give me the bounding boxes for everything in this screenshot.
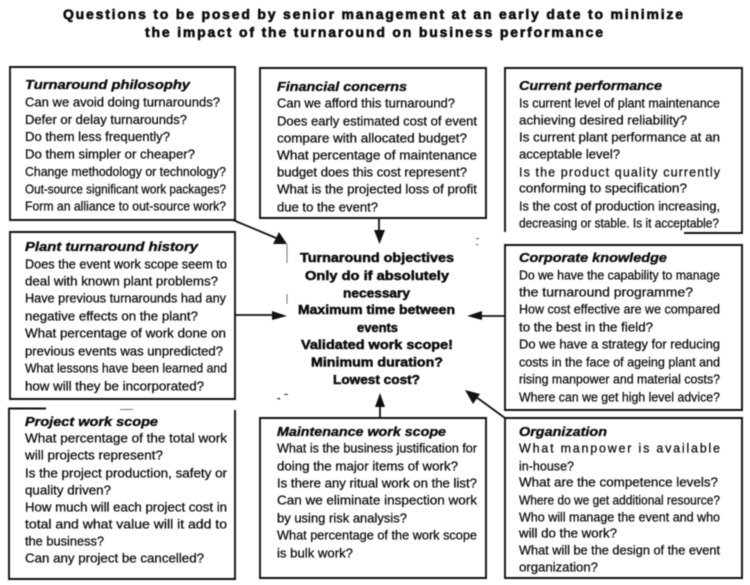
arrow: turnaround philosophy to objectives <box>233 220 287 244</box>
central objectives: events <box>357 320 398 335</box>
questions: project work scope: the business? <box>25 534 104 548</box>
panel: project work scope <box>9 408 235 579</box>
central objectives: Minimum duration? <box>311 354 443 370</box>
questions: turnaround philosophy: Change methodology or technology? <box>25 165 226 179</box>
questions: corporate knowledge: Where can we get high level advice? <box>519 390 720 404</box>
questions: project work scope: quality driven? <box>25 484 111 498</box>
questions: corporate knowledge <box>519 268 720 404</box>
central objectives: Turnaround objectives <box>300 250 454 265</box>
questions: plant turnaround history: Does the event work scope seem to <box>25 258 227 272</box>
questions: organization: What manpower is available <box>519 442 720 456</box>
questions: financial concerns <box>277 96 478 214</box>
heading: financial concerns: Financial concerns <box>277 79 407 94</box>
questions: organization <box>518 442 721 574</box>
questions: plant turnaround history: how will they be incorporated? <box>25 380 204 394</box>
arrow: corporate knowledge to objectives <box>467 311 505 320</box>
arrow: financial concerns to objectives <box>374 219 385 244</box>
panel: plant turnaround history <box>10 232 235 399</box>
questions: maintenance work scope: Can we eliminate inspection work <box>277 494 478 508</box>
panel: turnaround philosophy <box>10 67 235 220</box>
arrow: organization to objectives <box>465 390 505 418</box>
heading: plant turnaround history: Plant turnaround history <box>25 239 199 254</box>
questions: corporate knowledge: the turnaround programme? <box>519 286 693 300</box>
questions: maintenance work scope <box>277 442 478 560</box>
questions: turnaround philosophy: Out-source significant work packages? <box>25 182 226 196</box>
questions: plant turnaround history: deal with known plant problems? <box>25 274 218 288</box>
title: the impact of the turnaround on business performance <box>145 24 603 40</box>
questions: corporate knowledge: rising manpower and material costs? <box>519 372 720 386</box>
questions: turnaround philosophy <box>25 96 226 214</box>
questions: financial concerns: budget does this cost represent? <box>277 166 467 180</box>
questions: turnaround philosophy: Form an alliance to out-source work? <box>25 200 226 214</box>
title: Questions to be posed by senior management at an early date to minimize <box>63 6 683 22</box>
arrow: maintenance scope to objectives <box>375 393 385 418</box>
questions: maintenance work scope: is bulk work? <box>277 546 353 560</box>
questions: project work scope: How much will each project cost in <box>25 500 227 514</box>
questions: current performance: Is current plant performance at an <box>519 130 720 144</box>
questions: corporate knowledge: to the best in the field? <box>519 320 653 334</box>
questions: current performance: Is the product quality currently <box>519 166 721 180</box>
title <box>63 6 683 40</box>
heading: turnaround philosophy: Turnaround philosophy <box>25 77 191 92</box>
central objectives: Validated work scope! <box>301 337 453 352</box>
questions: financial concerns: Does early estimated cost of event <box>277 114 478 128</box>
questions: financial concerns: What percentage of maintenance <box>277 148 477 162</box>
questions: maintenance work scope: by using risk analysis? <box>277 512 407 526</box>
questions: current performance <box>519 96 721 230</box>
questions: turnaround philosophy: Defer or delay turnarounds? <box>25 113 187 127</box>
questions: corporate knowledge: costs in the face of ageing plant and <box>519 356 720 370</box>
questions: current performance: achieving desired reliability? <box>519 114 687 128</box>
questions: current performance: Is the cost of production increasing, <box>519 200 720 214</box>
heading: maintenance work scope: Maintenance work scope <box>277 424 446 439</box>
questions: maintenance work scope: Is there any ritual work on the list? <box>277 476 477 490</box>
questions: maintenance work scope: What percentage of the work scope <box>277 528 477 542</box>
central objectives: Lowest cost? <box>333 372 420 387</box>
central objectives <box>298 250 455 387</box>
questions: organization: will do the work? <box>518 526 617 540</box>
questions: turnaround philosophy: Do them simpler or cheaper? <box>25 148 195 162</box>
questions: current performance: decreasing or stable. Is it acceptable? <box>519 216 719 230</box>
questions: plant turnaround history: previous events was unpredicted? <box>25 344 223 358</box>
questions: project work scope: Can any project be cancelled? <box>25 552 204 566</box>
questions: corporate knowledge: How cost effective are we compared <box>519 302 720 316</box>
heading: organization: Organization <box>519 424 607 439</box>
questions: project work scope: will projects represent? <box>24 448 163 462</box>
heading: project work scope: Project work scope <box>25 414 158 429</box>
panel: maintenance work scope <box>260 418 486 578</box>
questions: project work scope <box>24 432 228 566</box>
questions: project work scope: What percentage of the total work <box>25 432 228 446</box>
scan marks <box>120 238 479 410</box>
questions: organization: What will be the design of the event <box>519 544 721 558</box>
heading: current performance: Current performance <box>519 78 662 93</box>
questions: organization: What are the competence levels? <box>519 476 718 490</box>
questions: financial concerns: compare with allocated budget? <box>277 132 467 146</box>
arrow: plant history to objectives <box>235 311 287 320</box>
questions: maintenance work scope: doing the major items of work? <box>277 460 458 474</box>
panel: financial concerns <box>260 68 486 218</box>
panel: corporate knowledge <box>505 245 742 410</box>
questions: plant turnaround history: negative effects on the plant? <box>25 310 198 324</box>
questions: current performance: Is current level of plant maintenance <box>519 96 720 110</box>
heading: corporate knowledge: Corporate knowledge <box>519 250 667 265</box>
central objectives: Only do if absolutely <box>305 268 450 283</box>
panel: organization <box>505 418 742 578</box>
questions: maintenance work scope: What is the business justification for <box>277 442 477 456</box>
questions: project work scope: Is the project production, safety or <box>25 466 227 480</box>
questions: current performance: acceptable level? <box>519 148 620 162</box>
questions: plant turnaround history <box>25 258 227 394</box>
questions: financial concerns: What is the projected loss of profit <box>277 182 478 196</box>
questions: organization: Who will manage the event and who <box>519 510 720 524</box>
questions: organization: in-house? <box>519 460 574 474</box>
questions: organization: Where do we get additional resource? <box>519 494 720 508</box>
questions: current performance: conforming to specification? <box>519 182 687 196</box>
questions: corporate knowledge: Do we have a strategy for reducing <box>519 338 720 352</box>
questions: organization: organization? <box>519 560 598 574</box>
questions: plant turnaround history: Have previous turnarounds had any <box>25 292 227 306</box>
central objectives: Maximum time between <box>298 302 455 317</box>
questions: plant turnaround history: What percentage of work done on <box>25 326 226 340</box>
questions: financial concerns: Can we afford this turnaround? <box>277 96 455 110</box>
questions: plant turnaround history: What lessons have been learned and <box>25 362 227 376</box>
questions: turnaround philosophy: Can we avoid doing turnarounds? <box>25 96 220 110</box>
questions: corporate knowledge: Do we have the capability to manage <box>519 268 720 282</box>
central objectives: necessary <box>343 286 411 300</box>
questions: project work scope: total and what value will it add to <box>25 518 227 532</box>
panel: current performance <box>505 68 742 233</box>
questions: turnaround philosophy: Do them less frequently? <box>25 130 170 144</box>
questions: financial concerns: due to the event? <box>277 200 378 214</box>
